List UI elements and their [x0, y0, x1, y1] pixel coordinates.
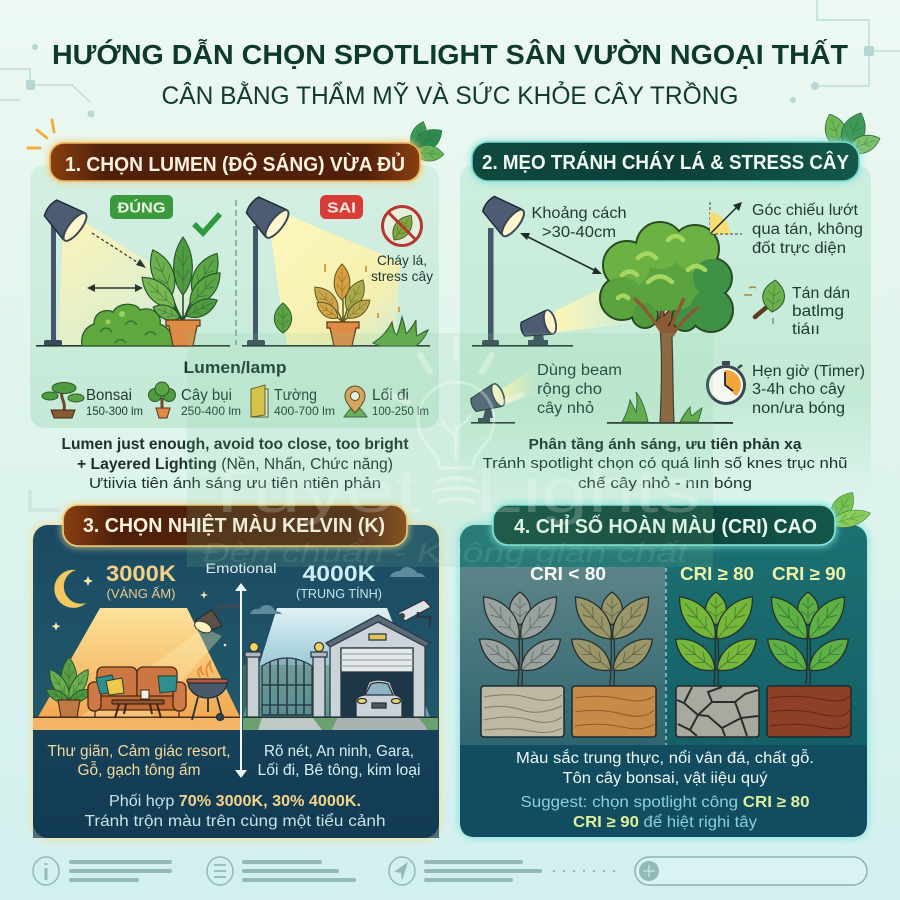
- icon: check mark: [194, 214, 220, 233]
- text: timer: non/ưa bóng: [752, 400, 845, 417]
- label: 4000K: 4000K: [302, 561, 376, 586]
- sofa: [88, 667, 186, 717]
- footer icon: info: [33, 857, 59, 885]
- icon: no burned leaf: [382, 206, 422, 246]
- scene: correct lighting: [36, 193, 230, 347]
- text: burned leaves: Cháy lá,: [377, 252, 427, 268]
- title: HƯỚNG DẪN CHỌN SPOTLIGHT SÂN VƯỜN NGOẠI THẤT: [52, 39, 848, 70]
- label: 3000K: 3000K: [106, 561, 176, 586]
- subtitle: CÂN BẰNG THẨM MỸ VÀ SỨC KHỎE CÂY TRỒNG: [162, 80, 738, 110]
- icon: path pin: [344, 386, 367, 417]
- text: lumen advice: Ưtiivia tiên ánh sáng ưu tiên ntiên phản: [89, 475, 381, 492]
- heading 4: [491, 503, 837, 547]
- icon: shrub: [148, 382, 176, 418]
- heading 1: [48, 141, 422, 183]
- text: warm uses: Gỗ, gạch tông ấm: [78, 762, 200, 779]
- text: suggestion: CRI ≥ 90 để hiệt righi tây: [573, 814, 757, 831]
- light beam on tree: [553, 282, 640, 333]
- text: wall: 400-700 lm: [274, 404, 335, 418]
- text: layered advice: Phân tầng ánh sáng, ưu tiên phản xạ: [528, 436, 802, 453]
- pot: [166, 320, 200, 346]
- text: shrub: Cây bụi: [181, 387, 232, 404]
- heading 3: 3. CHỌN NHIỆT MÀU KELVIN (K): [83, 513, 385, 537]
- text: wall: [274, 387, 335, 418]
- icon: timer: [708, 361, 744, 404]
- badge: SAI: SAI: [327, 200, 356, 216]
- text: mix advice: Phối hợp 70% 3000K, 30% 4000K.: [109, 793, 361, 810]
- footer icon: navigation: [389, 857, 415, 885]
- text: burned leaves: stress cây: [371, 268, 433, 284]
- camera: [398, 600, 432, 627]
- labels: cri: CRI ≥ 90: [772, 564, 846, 584]
- text: bonsai: 150-300 lm: [86, 404, 143, 418]
- text: mix advice: Tránh trộn màu trên cùng một tiểu cảnh: [84, 812, 386, 830]
- labels: cri: CRI < 80: [530, 564, 606, 584]
- text: lumen advice: + Layered Lighting (Nền, Nhấn, Chức năng): [77, 456, 393, 473]
- icon: leaves header 4: [824, 487, 873, 532]
- text: cool uses: Lối đi, Bê tông, kim loại: [258, 762, 420, 779]
- labels: cri: CRI ≥ 80: [680, 564, 754, 584]
- text: angle: đốt trực diện: [752, 240, 846, 257]
- label: 3000K: [106, 561, 176, 601]
- labels: cri: [530, 564, 846, 584]
- text: lumen advice: Lumen just enough, avoid too close, too bright: [62, 436, 409, 453]
- heading 1: 1. CHỌN LUMEN (ĐỘ SÁNG) VỪA ĐỦ: [65, 152, 405, 176]
- heading 3: [61, 503, 409, 548]
- scene: wrong lighting: [241, 190, 433, 347]
- text: path: 100-250 lm: [372, 404, 429, 418]
- cool scene: [243, 561, 438, 730]
- watermark: [187, 333, 713, 568]
- grass: [373, 317, 428, 346]
- heading 4: 4. CHỈ SỐ HOÀN MÀU (CRI) CAO: [514, 514, 817, 538]
- text: suggestion: Suggest: chọn spotlight công CRI ≥ 80: [520, 794, 810, 811]
- text: angle: Góc chiếu lướt: [752, 202, 859, 219]
- watermark: Đèn chuẩn - Không gian chất: [202, 537, 689, 568]
- text: layered advice: Tránh spotlight chọn có quá linh số knes trục nhũ: [482, 455, 848, 472]
- text: distance: [532, 205, 626, 241]
- text: timer: Hẹn giờ (Timer): [752, 363, 865, 380]
- text: bonsai: Bonsai: [86, 387, 132, 404]
- grill: [187, 662, 228, 720]
- text: color fidelity: Màu sắc trung thực, nổi vân đá, chất gỗ.: [516, 750, 814, 767]
- text: burned leaves: [371, 252, 433, 284]
- footer: [33, 857, 867, 885]
- footer lines 2: [242, 860, 356, 882]
- garage: [326, 615, 430, 717]
- text: angle: [752, 202, 863, 257]
- arrow: emotional scale: [235, 583, 247, 778]
- text: wide beam: Dùng beam: [537, 362, 622, 379]
- table: [112, 690, 164, 718]
- label: 4000K: (TRUNG TÍNH): [296, 586, 382, 601]
- icon: small leaf: [274, 303, 292, 333]
- footer lines 1: [69, 860, 172, 882]
- text: layered advice: [482, 436, 848, 492]
- text: distance: >30-40cm: [542, 224, 616, 241]
- text: bonsai: [86, 387, 143, 418]
- arrow: horizontal distance: [87, 284, 143, 292]
- text: path: Lối đi: [372, 387, 409, 404]
- plant: olive: [565, 589, 659, 685]
- text: wide beam: rộng cho: [537, 381, 602, 398]
- icon: wall: [251, 385, 268, 417]
- watermark: Lights: [476, 457, 700, 526]
- label: 4000K: [296, 561, 382, 601]
- plant in pot: [136, 237, 227, 324]
- icon: bonsai: [42, 382, 84, 418]
- icon: angle: [710, 202, 742, 234]
- plant: gray: [473, 589, 567, 685]
- text: lumen advice: [62, 436, 409, 492]
- text: color fidelity: Tôn cây bonsai, vật iiệu quý: [562, 770, 768, 787]
- small spotlight: [468, 366, 537, 424]
- car: [356, 680, 402, 717]
- text: distance: Khoảng cách: [532, 205, 626, 222]
- pot: [327, 322, 359, 346]
- watermark: Tuyet: [200, 457, 420, 526]
- plant: bright green: [669, 589, 763, 685]
- panel: 1 lumen: [28, 119, 447, 492]
- text: path: [372, 387, 429, 418]
- heading 2: [470, 140, 861, 183]
- warm scene: [33, 561, 240, 730]
- text: wide beam: [537, 362, 622, 417]
- badge: ĐÚNG: [110, 195, 173, 219]
- text: shrub: [181, 387, 241, 418]
- material: gray wood: [481, 686, 564, 737]
- text: canopy: batlmg: [792, 303, 844, 320]
- plant: [44, 657, 94, 706]
- footer lines 3: [424, 860, 542, 882]
- text: color fidelity: [516, 750, 814, 787]
- lamp post: [472, 190, 573, 347]
- label: 3000K: (VÀNG ẤM): [106, 586, 176, 601]
- clouds: [250, 567, 425, 614]
- footer icon: list: [207, 857, 233, 885]
- icon: leaves header 1: [407, 119, 447, 162]
- text: cool uses: [258, 743, 420, 779]
- text: layered advice: chế cây nhỏ - nın bóng: [578, 475, 752, 492]
- material: warm wood: [572, 686, 656, 737]
- ground spotlight: [518, 309, 558, 346]
- pot: [58, 700, 80, 717]
- panel: 3 kelvin: [31, 503, 441, 840]
- icon: leaves header 2: [820, 109, 883, 158]
- material: dark wood: [767, 686, 851, 737]
- text: cool uses: Rõ nét, An ninh, Gara,: [264, 743, 414, 760]
- bush: [82, 304, 175, 346]
- text: timer: 3-4h cho cây: [752, 381, 845, 398]
- text: canopy: [792, 285, 850, 338]
- tree: [600, 222, 733, 424]
- label: emotional: Emotional: [206, 560, 276, 576]
- badge: SAI: [320, 195, 363, 219]
- icon: moon: [54, 570, 86, 608]
- heading: lumen per lamp: Lumen/lamp: [184, 358, 286, 377]
- text: angle: qua tán, không: [752, 221, 863, 238]
- footer search pill: [635, 857, 867, 885]
- text: canopy: Tán dán: [792, 285, 850, 302]
- text: wide beam: cây nhỏ: [537, 400, 594, 417]
- badge: ĐÚNG: ĐÚNG: [118, 198, 166, 216]
- panel: 4 cri: [458, 487, 873, 839]
- pillows: [96, 675, 177, 695]
- text: canopy: tiáıı: [792, 321, 820, 338]
- text: suggestion: [520, 794, 810, 831]
- heading 2: 2. MẸO TRÁNH CHÁY LÁ & STRESS CÂY: [482, 150, 850, 174]
- text: mix advice: [84, 793, 386, 830]
- lamp on arm: [193, 606, 240, 635]
- text: shrub: 250-400 lm: [181, 404, 241, 418]
- text: warm uses: [48, 743, 230, 779]
- text: warm uses: Thư giãn, Cảm giác resort,: [48, 743, 230, 760]
- text: timer: [752, 363, 865, 417]
- plant burned: [309, 264, 374, 323]
- arrow: distance: [520, 233, 602, 274]
- material: stone: [676, 686, 759, 737]
- text: wall: Tường: [274, 387, 317, 404]
- plant: vivid green: [761, 589, 855, 685]
- icon: leaf magnifier: [744, 279, 786, 324]
- panel: 2 leaf burn: [460, 109, 883, 500]
- arrow: dashed distance: [92, 233, 146, 268]
- gate: [245, 642, 327, 717]
